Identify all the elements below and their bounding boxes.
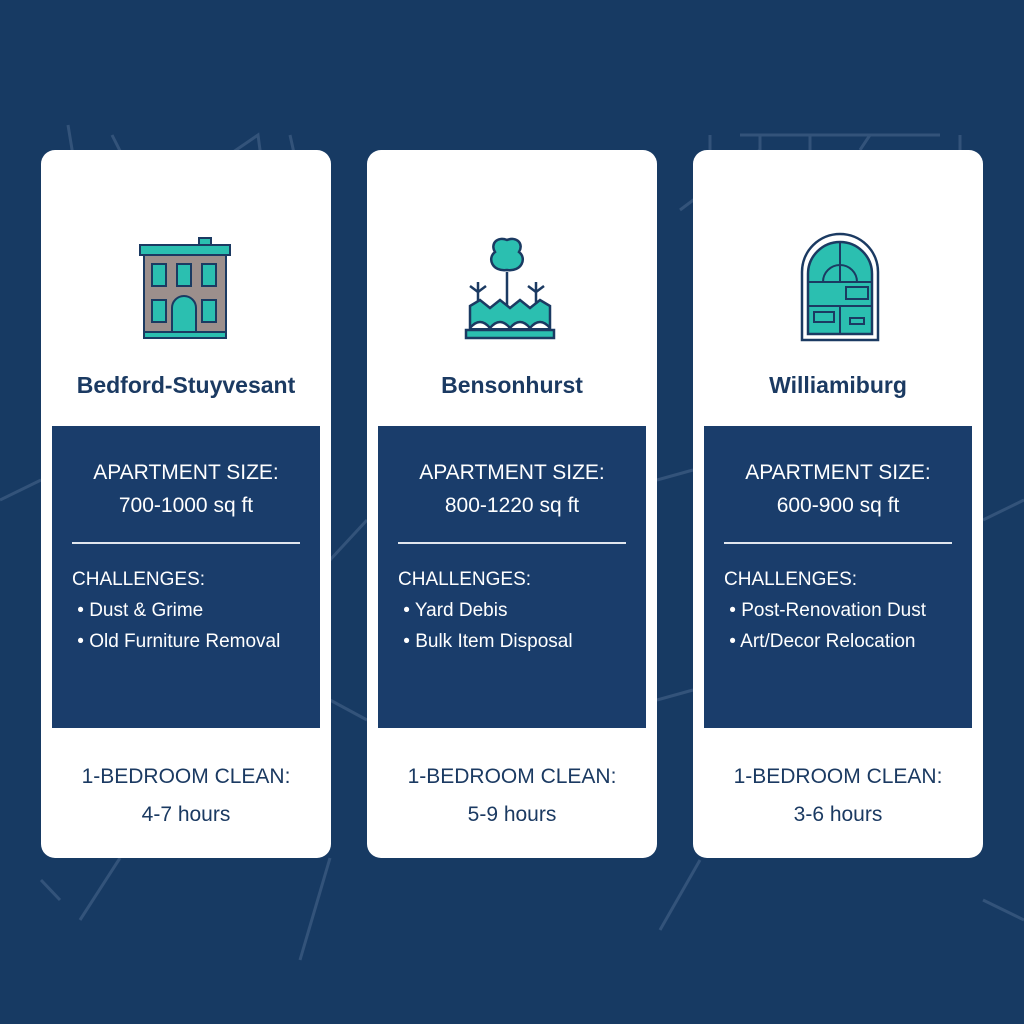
info box: 700-1000 sq ft xyxy=(119,494,253,517)
cleaning time: 4-7 hours xyxy=(142,803,230,826)
cleaning time: 5-9 hours xyxy=(468,803,556,826)
info box: CHALLENGES: xyxy=(724,569,857,590)
heading: Bedford-Stuyvesant xyxy=(77,372,295,398)
card: Bedford-Stuyvesant xyxy=(41,150,331,858)
icon: arched window xyxy=(800,232,880,342)
cleaning time: 1-BEDROOM CLEAN: xyxy=(82,765,290,788)
info box: • Old Furniture Removal xyxy=(77,631,280,652)
info box: • Art/Decor Relocation xyxy=(729,631,915,652)
info box xyxy=(52,426,320,728)
info box: APARTMENT SIZE: xyxy=(93,461,279,484)
card: Bensonhurst xyxy=(367,150,657,858)
info box: • Yard Debis xyxy=(403,600,507,621)
cleaning time xyxy=(734,765,942,826)
info box: APARTMENT SIZE: xyxy=(745,461,931,484)
info box: • Bulk Item Disposal xyxy=(403,631,573,652)
info box xyxy=(378,426,646,728)
info box: • Post-Renovation Dust xyxy=(729,600,926,621)
heading: Williamiburg xyxy=(769,372,907,398)
info box xyxy=(704,426,972,728)
info box: • Dust & Grime xyxy=(77,600,203,621)
cleaning time: 3-6 hours xyxy=(794,803,882,826)
icon: brownstone building xyxy=(139,237,231,339)
heading: Bensonhurst xyxy=(441,372,583,398)
cleaning time xyxy=(82,765,290,826)
info box: 800-1220 sq ft xyxy=(445,494,579,517)
card: Williamiburg xyxy=(693,150,983,858)
cleaning time: 1-BEDROOM CLEAN: xyxy=(734,765,942,788)
info box: 600-900 sq ft xyxy=(777,494,899,517)
cleaning time xyxy=(408,765,616,826)
info box: CHALLENGES: xyxy=(72,569,205,590)
icon: garden xyxy=(464,238,556,340)
info box: CHALLENGES: xyxy=(398,569,531,590)
cleaning time: 1-BEDROOM CLEAN: xyxy=(408,765,616,788)
info box: APARTMENT SIZE: xyxy=(419,461,605,484)
